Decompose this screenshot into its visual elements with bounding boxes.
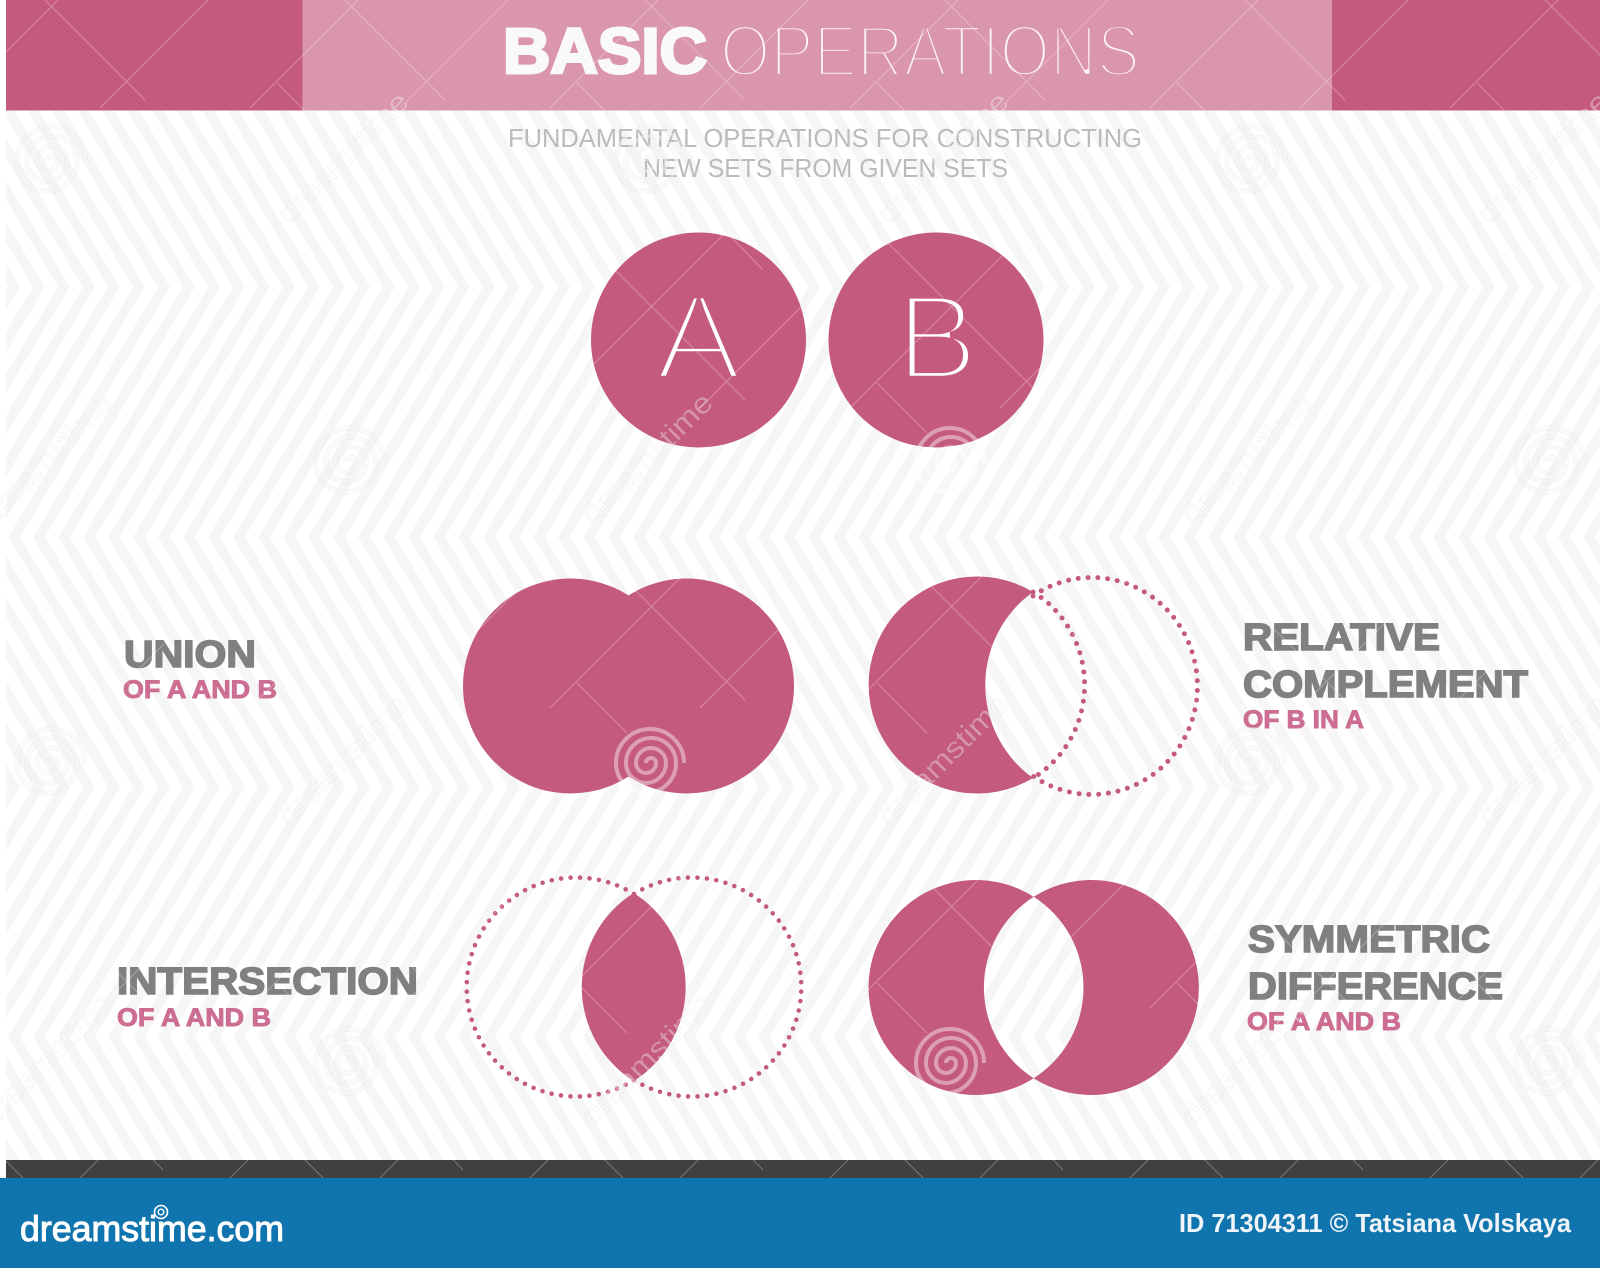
set B circle — [828, 232, 1044, 448]
subtitle — [508, 123, 1142, 183]
relative complement label — [1243, 617, 1528, 734]
relative complement label: COMPLEMENT — [1243, 664, 1528, 706]
set B circle: B — [896, 269, 978, 405]
footer bar — [0, 1178, 1600, 1268]
watermark text: dreamstime — [271, 688, 416, 832]
set A circle — [591, 232, 806, 448]
symmetric difference diagram — [868, 880, 1199, 1095]
intersection label: INTERSECTION — [117, 961, 418, 1003]
footer credit: ID 71304311 © Tatsiana Volskaya — [1179, 1208, 1572, 1238]
watermark text: dreamstime — [575, 988, 720, 1132]
watermark text: dreamstime — [271, 86, 416, 230]
watermark text: dreamstime — [1175, 988, 1320, 1132]
watermark text: dreamstime — [1175, 387, 1320, 531]
title: BASIC — [503, 15, 707, 87]
watermark spiral outlines — [17, 127, 1584, 1093]
watermark text: dreamstime — [1471, 86, 1600, 230]
set A circle: A — [656, 269, 742, 405]
subtitle: FUNDAMENTAL OPERATIONS FOR CONSTRUCTING — [508, 123, 1142, 153]
watermark text: dreamstime — [871, 86, 1016, 230]
union label: OF A AND B — [123, 676, 277, 704]
symmetric difference label: OF A AND B — [1247, 1008, 1401, 1036]
union diagram — [463, 578, 794, 794]
relative complement diagram — [869, 576, 1197, 794]
union label — [123, 634, 277, 704]
header band — [6, 0, 1600, 110]
watermark text: dreamstime — [1471, 688, 1600, 832]
watermark spirals — [17, 127, 1584, 1093]
title: OPERATIONS — [720, 12, 1140, 92]
watermark text: dreamstime — [871, 688, 1016, 832]
intersection label: OF A AND B — [117, 1004, 271, 1032]
dark bottom strip — [6, 1160, 1600, 1178]
union label: UNION — [124, 634, 256, 676]
symmetric difference label — [1247, 919, 1503, 1036]
title — [503, 12, 1140, 92]
intersection label — [117, 961, 418, 1032]
footer logo: dreamstime.com — [20, 1208, 284, 1249]
symmetric difference label: SYMMETRIC — [1248, 919, 1490, 961]
intersection diagram — [467, 877, 801, 1096]
relative complement label: RELATIVE — [1243, 617, 1440, 659]
watermark text: dreamstime — [575, 387, 720, 531]
subtitle: NEW SETS FROM GIVEN SETS — [643, 153, 1008, 183]
symmetric difference label: DIFFERENCE — [1248, 966, 1503, 1008]
relative complement label: OF B IN A — [1243, 706, 1364, 734]
